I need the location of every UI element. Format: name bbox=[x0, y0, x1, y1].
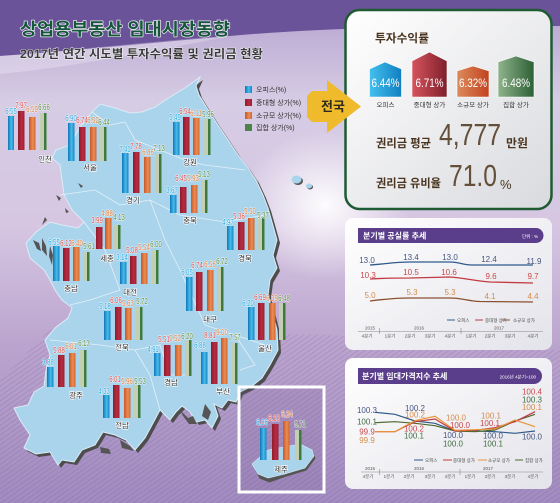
bars: Gwangju bbox=[42, 339, 90, 400]
bars: Seoul: 6.52 bbox=[87, 116, 99, 125]
bars: Ulsan: 울산 bbox=[258, 343, 272, 353]
bars: Chungbuk: 6.45 bbox=[175, 174, 187, 183]
house: aggregate shops bbox=[498, 56, 534, 109]
bars: Gyeonggi: 경기 bbox=[126, 195, 140, 205]
bars: Daegu: 6.74 bbox=[191, 261, 203, 270]
axis: vacancy quarters: 1분기 bbox=[385, 332, 395, 340]
data labels: rent index: 100.0 bbox=[446, 414, 467, 423]
axis: vacancy quarters: 2분기 bbox=[405, 332, 415, 340]
bars: Gyeongbuk: 4.97 bbox=[222, 218, 234, 227]
bars: Gangwon: 강원 bbox=[183, 157, 197, 167]
bars: Daejeon: 5.08 bbox=[126, 246, 138, 255]
panel: investment return summary bbox=[346, 10, 552, 209]
bars: Seoul: 서울 bbox=[83, 163, 97, 172]
data labels: rent index: 100.4 bbox=[522, 388, 543, 397]
bars: Gangwon: 6.11 bbox=[190, 109, 202, 118]
legend: rent index chart: 중대형 상가 bbox=[453, 457, 475, 464]
line chart: vacancy rates: 13.4 bbox=[403, 253, 419, 262]
bars: Daegu: 6.56 bbox=[204, 260, 216, 269]
bars: Ulsan: 6.39 bbox=[266, 294, 278, 303]
data labels: rent index: 99.9 bbox=[359, 428, 375, 437]
line chart: vacancy rates: 13.0 bbox=[359, 256, 375, 265]
bars: Jeonnam: 5.96 bbox=[121, 377, 133, 386]
data labels: rent index: 100.3 bbox=[522, 396, 543, 405]
axis: vacancy quarters: 2분기 bbox=[485, 332, 495, 340]
data labels: rent index: 100.3 bbox=[357, 406, 378, 415]
bars: Gyeonggi: 7.41 bbox=[120, 145, 131, 154]
bars: Gyeongbuk: 5.37 bbox=[257, 211, 269, 220]
bars: Jeonbuk: 5.63 bbox=[122, 299, 134, 308]
line chart: vacancy rates: 12.4 bbox=[481, 255, 497, 264]
house: mid-large shops bbox=[412, 52, 447, 109]
axis: rent index quarters bbox=[361, 466, 543, 480]
axis: rent index quarters: 1분기 bbox=[465, 473, 475, 480]
bars: Gyeongbuk: 경북 bbox=[238, 253, 252, 263]
axis: rent index quarters: 3분기 bbox=[505, 473, 515, 480]
bars: Gyeongnam: 4.91 bbox=[148, 345, 159, 354]
bars: Jeonnam: 6.01 bbox=[109, 375, 121, 384]
house: small shops: 6.32% bbox=[459, 78, 487, 90]
bars: Jeonnam bbox=[98, 375, 146, 430]
stat: average key money: 권리금 평균 bbox=[376, 137, 431, 150]
data labels: rent index: 100.1 bbox=[483, 439, 504, 448]
line chart: vacancy rates: 10.6 bbox=[441, 268, 457, 277]
bars: Gyeongnam: 5.52 bbox=[169, 334, 181, 343]
legend: rent index chart bbox=[414, 457, 543, 464]
header: vacancy trend: 단위 : % bbox=[522, 233, 538, 240]
bars: Gyeonggi: 7.78 bbox=[130, 142, 142, 151]
axis: rent index quarters: 2017 bbox=[483, 466, 494, 471]
bars: Daejeon: 5.54 bbox=[138, 243, 150, 252]
line chart: vacancy rates: 10.3 bbox=[360, 271, 376, 280]
bars: Sejong: 4.13 bbox=[113, 213, 125, 222]
bars: Gwangju: 5.88 bbox=[53, 346, 65, 355]
data labels: rent index: 100.1 bbox=[480, 419, 501, 428]
bars: Incheon: 인천 bbox=[38, 154, 52, 164]
bars: Busan: 부산 bbox=[216, 386, 230, 396]
bars: Chungbuk bbox=[166, 170, 210, 225]
bars: Gyeongbuk: 5.50 bbox=[244, 207, 256, 216]
data labels: rent index: 100.0 bbox=[443, 439, 464, 448]
axis: rent index quarters: 4분기 bbox=[445, 473, 455, 480]
legend: vacancy chart: 중대형 상가 bbox=[485, 317, 507, 324]
Jeju inset box bbox=[239, 387, 324, 492]
line chart: vacancy rates: 4.1 bbox=[484, 292, 496, 301]
house: aggregate shops: 6.48% bbox=[502, 78, 530, 90]
axis: vacancy quarters: 3분기 bbox=[425, 332, 435, 340]
axis: vacancy quarters: 1분기 bbox=[466, 332, 476, 340]
bars: Jeju: 제주 bbox=[274, 465, 288, 474]
bars: Seoul bbox=[65, 114, 110, 172]
axis: vacancy quarters: 2017 bbox=[494, 326, 505, 330]
data labels: rent index: 100.1 bbox=[357, 418, 378, 427]
bars: Busan: 6.88 bbox=[194, 341, 206, 350]
line chart: vacancy rates: 5.3 bbox=[444, 288, 456, 297]
house: office: 오피스 bbox=[377, 100, 394, 109]
bars: Gyeonggi: 7.13 bbox=[153, 144, 165, 153]
map of South Korea bbox=[14, 77, 313, 468]
bars: Gwangju: 6.13 bbox=[78, 339, 90, 348]
house: mid-large shops: 6.71% bbox=[416, 78, 444, 90]
bars: Daegu: 대구 bbox=[203, 315, 217, 324]
bars: Jeju: 6.06 bbox=[256, 418, 268, 427]
data labels: rent index: 100.2 bbox=[405, 404, 426, 413]
bars: Ulsan: 6.69 bbox=[254, 293, 266, 302]
data labels: rent index: 100.0 bbox=[443, 431, 464, 440]
house: small shops: 소규모 상가 bbox=[457, 100, 489, 109]
data labels: rent index: 99.9 bbox=[359, 436, 375, 445]
data labels: rent index: 100.1 bbox=[481, 412, 502, 421]
bars: Busan: 7.57 bbox=[230, 333, 241, 342]
bars: Ulsan: 6.48 bbox=[278, 294, 290, 303]
legend: 소규모 상가(%) bbox=[256, 111, 301, 120]
axis: rent index quarters: 2분기 bbox=[404, 473, 414, 480]
bars: Chungnam bbox=[48, 238, 95, 293]
header: vacancy trend bbox=[358, 228, 544, 243]
bars: Jeonnam: 5.53 bbox=[134, 377, 146, 386]
panel: vacancy chart bbox=[345, 218, 552, 350]
data labels: rent index bbox=[357, 388, 543, 448]
bars: Gyeongnam bbox=[148, 332, 193, 387]
bars: Daegu bbox=[181, 257, 228, 324]
bars: Busan: 9.00 bbox=[216, 328, 228, 337]
legend: vacancy chart: 오피스 bbox=[457, 317, 469, 324]
subtitle: 2017년 연간 시도별 투자수익률 및 권리금 현황 bbox=[20, 46, 263, 61]
bars: Daejeon: 대전 bbox=[123, 287, 137, 297]
line chart: vacancy rates: 11.9 bbox=[527, 257, 542, 266]
house: office: 6.44% bbox=[372, 78, 400, 90]
heading: investment return: 투자수익률 bbox=[375, 32, 429, 45]
header: rent index trend: 분기별 임대가격지수 추세 bbox=[362, 371, 447, 381]
bars: Gwangju: 광주 bbox=[69, 390, 83, 400]
bars: Jeonbuk bbox=[99, 296, 148, 352]
bars: Gyeongnam: 5.51 bbox=[158, 335, 170, 344]
bars: Daegu: 6.72 bbox=[216, 257, 228, 266]
axis: rent index quarters: 2분기 bbox=[485, 473, 495, 480]
bars: Daejeon bbox=[116, 240, 162, 297]
bars: Gwangju: 6.01 bbox=[65, 342, 77, 351]
bars: Gyeongbuk: 5.36 bbox=[233, 212, 245, 221]
bars: Gangwon: 5.49 bbox=[169, 113, 181, 122]
bars: Daejeon: 6.00 bbox=[150, 240, 162, 249]
bars: Busan bbox=[194, 328, 241, 396]
bars: Incheon: 7.97 bbox=[15, 101, 27, 110]
line chart: vacancy rates: 9.7 bbox=[527, 272, 539, 281]
bars: Gwangju: 3.88 bbox=[42, 358, 54, 367]
house: office bbox=[370, 62, 402, 109]
panel: rent index chart bbox=[345, 358, 552, 489]
data labels: rent index: 100.2 bbox=[404, 425, 425, 434]
axis: rent index quarters: 2016 bbox=[414, 466, 425, 471]
legend bbox=[245, 85, 301, 132]
axis: rent index quarters: 4분기 bbox=[528, 473, 538, 480]
stat: average key money: 만원 bbox=[506, 136, 528, 150]
bars: Chungbuk: 5.93 bbox=[187, 174, 199, 183]
bars: Ulsan: 6.20 bbox=[242, 299, 254, 308]
data labels: rent index: 100.1 bbox=[404, 432, 425, 441]
bars: Chungbuk: 충북 bbox=[183, 216, 197, 225]
axis: rent index quarters: 2015 bbox=[365, 466, 376, 471]
bars: Jeju: 6.24 bbox=[281, 410, 293, 419]
axis: vacancy quarters bbox=[358, 326, 543, 340]
bars: Incheon: 6.55 bbox=[5, 107, 17, 116]
bars: Gyeongbuk bbox=[222, 207, 269, 263]
house: mid-large shops: 중대형 상가 bbox=[414, 100, 445, 109]
header: vacancy trend: 분기별 공실률 추세 bbox=[363, 230, 426, 240]
data labels: rent index: 100.0 bbox=[483, 432, 504, 441]
icon: Ulleungdo islands bbox=[292, 176, 313, 190]
axis: vacancy quarters: 4분기 bbox=[362, 332, 372, 340]
house: aggregate shops: 집합 상가 bbox=[503, 100, 529, 109]
legend: vacancy chart bbox=[447, 317, 535, 324]
axis: vacancy quarters: 4분기 bbox=[528, 332, 538, 340]
stat: key money ratio: 71.0 bbox=[449, 158, 497, 193]
bars: Seoul: 6.90 bbox=[65, 114, 77, 123]
legend: rent index chart: 오피스 bbox=[425, 457, 437, 464]
bars: Chungnam: 6.40 bbox=[71, 239, 83, 248]
data labels: rent index: 100.0 bbox=[522, 433, 543, 442]
line chart: rent index bbox=[375, 412, 535, 433]
legend: vacancy chart: 소규모 상가 bbox=[513, 317, 535, 324]
bars: Incheon: 6.59 bbox=[26, 105, 38, 114]
bars: Sejong bbox=[91, 209, 125, 263]
header: rent index trend bbox=[358, 368, 542, 384]
bars: Jeonbuk: 6.06 bbox=[110, 296, 122, 305]
legend: 중대형 상가(%) bbox=[256, 98, 301, 107]
bars: Gangwon: 5.96 bbox=[202, 110, 214, 119]
bars: Gyeongnam: 경남 bbox=[164, 377, 178, 387]
legend: rent index chart: 소규모 상가 bbox=[488, 457, 510, 464]
Jeju island bbox=[252, 444, 316, 482]
data labels: rent index: 100.0 bbox=[450, 421, 471, 430]
line chart: vacancy rates: 13.0 bbox=[442, 253, 458, 262]
bars: Chungnam: 5.61 bbox=[83, 242, 95, 251]
arrow: national bbox=[307, 80, 361, 133]
stat: key money ratio: % bbox=[500, 177, 512, 192]
bars: Chungnam: 충남 bbox=[64, 284, 78, 293]
stat: key money ratio: 권리금 유비율 bbox=[376, 177, 441, 190]
bars: Daejeon: 3.14 bbox=[116, 253, 128, 262]
bars: Daegu: 6.05 bbox=[181, 268, 193, 277]
stat: average key money: 4,777 bbox=[439, 117, 501, 152]
bars: Chungnam: 6.12 bbox=[60, 239, 72, 248]
bars: Sejong: 세종 bbox=[100, 254, 114, 263]
bars: Jeonbuk: 5.18 bbox=[99, 302, 111, 311]
bars: Incheon: 6.66 bbox=[38, 103, 50, 112]
arrow: national: 전국 bbox=[321, 99, 345, 114]
bars: Gyeongnam: 6.20 bbox=[181, 332, 193, 341]
bars: Gangwon bbox=[169, 107, 214, 167]
bars: Sejong: 4.88 bbox=[101, 209, 113, 218]
title: 상업용부동산 임대시장동향 bbox=[20, 20, 230, 39]
line chart: vacancy rates: 5.3 bbox=[406, 288, 418, 297]
bars: Jeonbuk: 5.72 bbox=[136, 297, 148, 306]
axis: rent index quarters: 3분기 bbox=[425, 473, 435, 480]
line chart: vacancy rates: 10.5 bbox=[403, 268, 419, 277]
stat: average key money bbox=[376, 117, 528, 152]
data labels: rent index: 100.1 bbox=[522, 403, 543, 412]
bars: Sejong: 3.99 bbox=[91, 216, 103, 225]
bars: Jeonnam: 4.33 bbox=[98, 387, 110, 396]
bars: Chungnam: 6.55 bbox=[48, 238, 60, 247]
bars: Seoul: 6.74 bbox=[76, 116, 88, 125]
data labels: rent index: 100.2 bbox=[405, 411, 426, 420]
legend: 오피스(%) bbox=[256, 85, 286, 94]
axis: rent index quarters: 4분기 bbox=[363, 473, 373, 480]
axis: vacancy quarters: 2016 bbox=[414, 326, 425, 330]
bars: Incheon bbox=[5, 101, 52, 164]
bars: Jeju: 5.71 bbox=[294, 420, 306, 429]
bars: Gyeonggi bbox=[120, 142, 165, 205]
line chart: vacancy rates: 5.0 bbox=[364, 291, 376, 300]
line chart: vacancy rates: 4.4 bbox=[527, 292, 539, 301]
legend: rent index chart: 집합 상가 bbox=[525, 457, 543, 464]
axis: vacancy quarters: 2015 bbox=[365, 326, 376, 330]
bars: Seoul: 6.44 bbox=[98, 118, 110, 127]
bars: Jeonnam: 전남 bbox=[115, 420, 129, 430]
axis: vacancy quarters: 4분기 bbox=[445, 332, 455, 340]
header: rent index trend: 2016년 4분기=100 bbox=[500, 374, 536, 380]
bars: Jeju: 6.18 bbox=[268, 414, 280, 423]
stat: key money ratio bbox=[376, 158, 512, 193]
bars: Chungbuk: 3.67 bbox=[166, 186, 178, 195]
line chart: vacancy rates: 9.6 bbox=[485, 272, 497, 281]
house: small shops bbox=[457, 66, 489, 109]
legend: 집합 상가(%) bbox=[256, 123, 295, 132]
bars: Ulsan bbox=[242, 293, 290, 353]
axis: rent index quarters: 1분기 bbox=[384, 473, 394, 480]
axis: vacancy quarters: 3분기 bbox=[505, 332, 515, 340]
bars: Gyeonggi: 6.86 bbox=[142, 148, 154, 157]
bars: Busan: 8.81 bbox=[204, 331, 216, 340]
bars: Jeonbuk: 전북 bbox=[115, 342, 129, 352]
bars: Jeju bbox=[256, 410, 306, 474]
bars: Chungbuk: 5.13 bbox=[198, 170, 210, 179]
bars: Gangwon: 6.54 bbox=[179, 107, 191, 116]
line chart: vacancy rates bbox=[359, 253, 542, 302]
